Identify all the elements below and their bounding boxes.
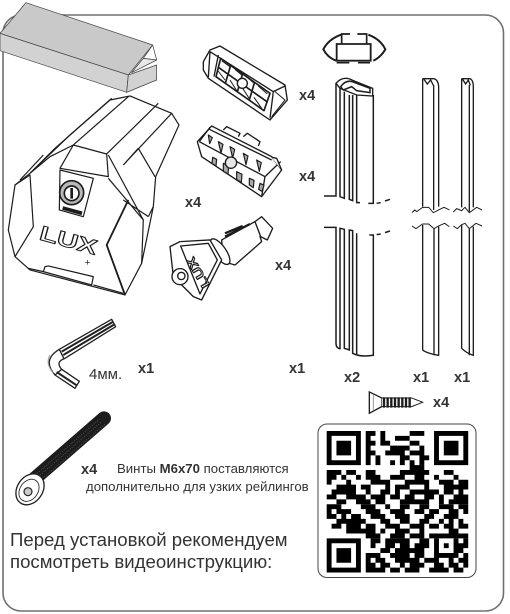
icon: upper rubber pad [203, 46, 287, 120]
icon: bracket lock [60, 181, 84, 213]
icon: countersunk screw [369, 392, 423, 413]
quantity labels: x1 [413, 370, 429, 386]
icon: key with lock cylinder [170, 217, 273, 300]
hex key size label: 4мм. [89, 366, 122, 383]
icon: main rail profile [324, 78, 390, 356]
quantity labels [81, 88, 470, 478]
icon: lower rubber pad [197, 126, 282, 197]
quantity labels: x1 [454, 370, 470, 386]
quantity labels: x4 [185, 195, 201, 211]
icon: rail cross-section [323, 34, 385, 63]
quantity labels: x1 [138, 361, 154, 377]
icon: hex key 4mm [48, 319, 116, 388]
bolt note: Винты М6х70 поставляются [117, 461, 289, 476]
icon: key with lock cylinder: LUX [184, 255, 213, 290]
LUX logo: LUX [37, 222, 100, 260]
video instruction text: Перед установкой рекомендуем [10, 529, 288, 550]
icon: long M6x70 bolt [10, 418, 105, 510]
quantity labels: x4 [299, 88, 315, 104]
quantity labels: x4 [299, 169, 315, 185]
QR finder patterns [329, 433, 466, 570]
icon: grey packing box [0, 3, 157, 92]
icon: LUX roof rack bracket [8, 96, 179, 295]
quantity labels: x1 [289, 361, 305, 377]
quantity labels: x4 [433, 395, 449, 411]
quantity labels: x2 [344, 370, 360, 386]
QR code panel [318, 424, 476, 578]
icon: thin rail B [453, 79, 482, 355]
quantity labels: x4 [275, 258, 291, 274]
icon: thin rail A [412, 79, 449, 355]
video instruction text: посмотреть видеоинструкцию: [10, 551, 272, 572]
bolt note: дополнительно для узких рейлингов [86, 479, 309, 494]
quantity labels: x4 [81, 462, 97, 478]
